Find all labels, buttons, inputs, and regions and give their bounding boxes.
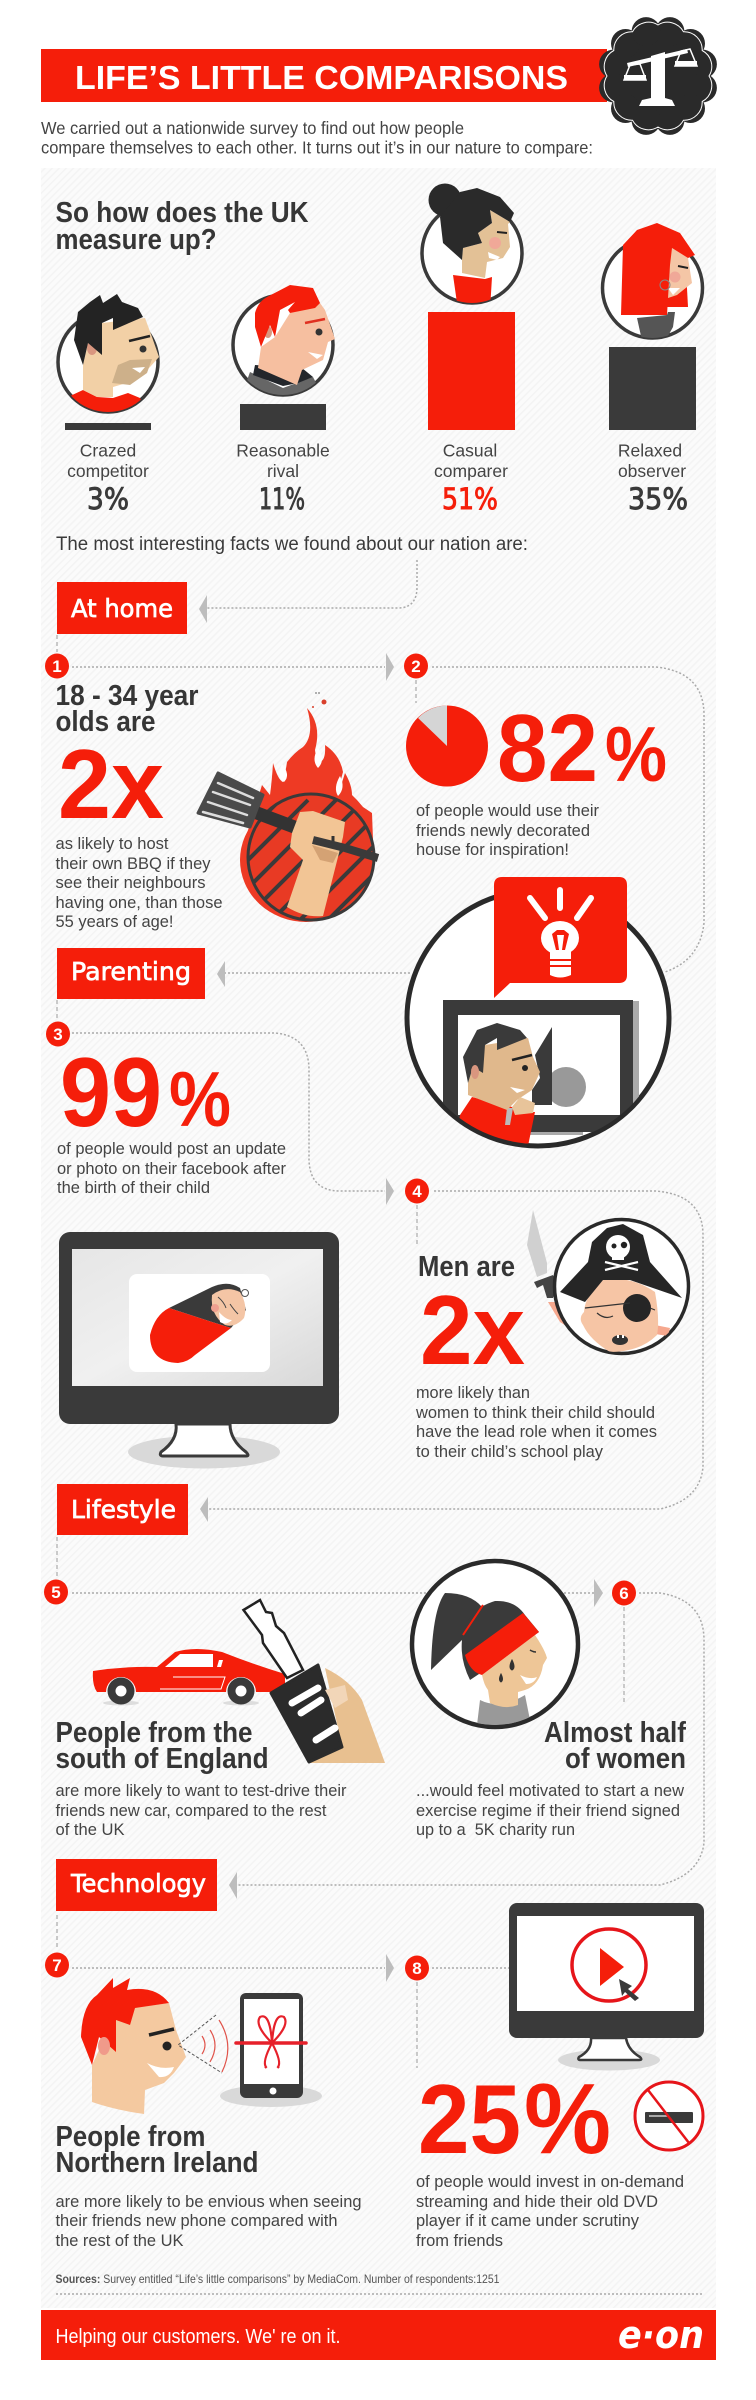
fact 2 text: 82 bbox=[497, 695, 598, 802]
intro text: compare themselves to each other. It turns out it’s in our nature to compare: bbox=[41, 138, 593, 158]
fact 7 text: Northern Ireland bbox=[56, 2147, 258, 2179]
fact 8 text: streaming and hide their old DVD bbox=[416, 2192, 658, 2211]
connector: 2 bbox=[415, 680, 417, 703]
fact 3 text: or photo on their facebook after bbox=[57, 1159, 286, 1178]
fact 5 text: friends new car, compared to the rest bbox=[56, 1801, 327, 1820]
fact 5 text: People from the bbox=[56, 1717, 252, 1749]
fact 7 text: the rest of the UK bbox=[56, 2231, 184, 2250]
stat: reasonable rival: 11% bbox=[259, 482, 305, 516]
connector: lifestyle to 5 bbox=[56, 1537, 58, 1578]
icon: BBQ grill with fist and spatula bbox=[196, 692, 380, 922]
number 2: 2 bbox=[411, 657, 421, 676]
fact 1 text: see their neighbours bbox=[56, 873, 206, 892]
intro text: We carried out a nationwide survey to find out how people bbox=[41, 118, 464, 138]
stat: relaxed observer: 35% bbox=[628, 482, 688, 516]
fact 7 text: People from bbox=[56, 2121, 206, 2153]
fact 8 text: player if it came under scrutiny bbox=[416, 2211, 639, 2230]
fact 3 text: the birth of their child bbox=[57, 1178, 210, 1197]
stat: relaxed observer: Relaxed bbox=[618, 440, 682, 460]
fact 7 text: their friends new phone compared with bbox=[56, 2211, 338, 2230]
number 6: 6 bbox=[619, 1584, 629, 1603]
icon: no DVD player bbox=[635, 2082, 703, 2150]
heading: measure up: So how does the UK bbox=[56, 197, 309, 229]
fact 5 text bbox=[56, 1717, 347, 1839]
fact 1 text: their own BBQ if they bbox=[56, 854, 211, 873]
section heading: technology: Technology bbox=[70, 1869, 206, 1898]
section heading: parenting bbox=[57, 948, 205, 999]
section heading: at home: At home bbox=[71, 594, 173, 623]
connector: 2 to parenting bbox=[217, 667, 704, 987]
illustration: pirate child bbox=[527, 1210, 688, 1354]
section heading: lifestyle bbox=[57, 1484, 188, 1535]
fact 5 text: are more likely to want to test-drive their bbox=[56, 1781, 347, 1800]
connector: facts to at home bbox=[199, 560, 417, 623]
stat: casual comparer: 51% bbox=[442, 482, 498, 516]
connector: 1 to 2 bbox=[72, 653, 394, 681]
fact 4 text: to their child’s school play bbox=[416, 1442, 603, 1461]
fact 6 text bbox=[416, 1717, 686, 1839]
fact 8 text: of people would invest in on-demand bbox=[416, 2172, 684, 2191]
illustration: sports car bbox=[93, 1649, 285, 1706]
illustration: woman runner bbox=[412, 1561, 578, 1727]
bar chart: comparison types bbox=[65, 312, 696, 430]
fact 6 text: of women bbox=[565, 1743, 686, 1775]
fact 2 text: house for inspiration! bbox=[416, 840, 569, 859]
fact 7 text bbox=[56, 2121, 362, 2250]
section heading: technology bbox=[56, 1859, 217, 1911]
fact 3 text: of people would post an update bbox=[57, 1139, 286, 1158]
stat: crazed competitor: competitor bbox=[67, 461, 149, 481]
stat: reasonable rival: rival bbox=[267, 461, 299, 481]
connector: 6 to technology bbox=[229, 1593, 704, 1899]
connector: 5 to 6 bbox=[72, 1579, 603, 1607]
icon: scales badge bbox=[599, 17, 717, 135]
connector: 6 bbox=[623, 1607, 625, 1703]
fact 8 text bbox=[416, 2063, 684, 2250]
illustration: monitor with baby bbox=[59, 1232, 339, 1468]
number 7: 7 bbox=[52, 1956, 62, 1975]
fact 8 text: % bbox=[524, 2063, 611, 2175]
connector: 8 bbox=[417, 1968, 509, 2068]
stat: reasonable rival: Reasonable bbox=[236, 440, 330, 460]
fact 5 text: south of England bbox=[56, 1743, 268, 1775]
illustration: man at window with lightbulb idea bbox=[407, 877, 669, 1146]
fact 8 text: from friends bbox=[416, 2231, 503, 2250]
fact 2 text bbox=[416, 695, 667, 859]
connector: parenting to 3 bbox=[56, 1000, 58, 1020]
portrait: relaxed observer bbox=[602, 223, 702, 345]
fact 4 text: 2x bbox=[420, 1275, 525, 1385]
portrait: casual comparer bbox=[422, 184, 522, 310]
fact 6 text: Almost half bbox=[544, 1717, 686, 1749]
fact 1 text: as likely to host bbox=[56, 834, 169, 853]
number 1: 1 bbox=[52, 657, 62, 676]
illustration: phone with ribbon bbox=[220, 1993, 322, 2107]
fact 4 text: women to think their child should bbox=[415, 1403, 655, 1422]
fact 4 text bbox=[415, 1251, 657, 1461]
intro text bbox=[41, 118, 593, 158]
stat: casual comparer: comparer bbox=[434, 461, 508, 481]
fact 6 text: ...would feel motivated to start a new bbox=[416, 1781, 685, 1800]
connector: 7 to 8 bbox=[72, 1954, 394, 1982]
fact 1 text: 55 years of age! bbox=[56, 912, 174, 931]
number 5: 5 bbox=[51, 1583, 61, 1602]
fact 1 text: olds are bbox=[56, 706, 156, 738]
footer banner bbox=[41, 2310, 716, 2360]
illustration: hand holding car key bbox=[244, 1600, 385, 1763]
fact 3 text: 99 bbox=[60, 1037, 162, 1147]
connector: 3 to 4 bbox=[72, 1033, 394, 1205]
fact 1 text: having one, than those bbox=[56, 893, 222, 912]
heading: measure up bbox=[56, 197, 309, 256]
stat: casual comparer: Casual bbox=[443, 440, 497, 460]
title banner: LIFE’S LITTLE COMPARISONS bbox=[75, 59, 568, 96]
connector: 4 to lifestyle bbox=[200, 1191, 703, 1522]
fact 1 text: 18 - 34 year bbox=[56, 680, 198, 712]
heading: measure up: measure up? bbox=[56, 224, 216, 256]
number 5 bbox=[44, 1580, 68, 1604]
number 1 bbox=[45, 654, 69, 678]
fact 1 text: 2x bbox=[58, 729, 164, 839]
footer banner: Helping our customers. We' re on it. bbox=[56, 2326, 340, 2348]
illustration: monitor with play button bbox=[509, 1903, 704, 2070]
number 8 bbox=[405, 1956, 429, 1980]
connector: at home to 1 bbox=[56, 635, 58, 652]
portrait: crazed competitor bbox=[58, 294, 159, 420]
number 7 bbox=[45, 1952, 69, 1978]
number 2 bbox=[404, 654, 428, 678]
footer banner: e·on bbox=[618, 2313, 704, 2357]
sight cone bbox=[178, 2015, 228, 2073]
fact 1 text bbox=[56, 680, 222, 931]
stat: reasonable rival bbox=[236, 440, 330, 516]
section heading: parenting: Parenting bbox=[71, 957, 191, 986]
stat: crazed competitor: 3% bbox=[87, 482, 129, 516]
icon: pie chart 82 percent bbox=[406, 706, 488, 786]
title banner bbox=[41, 49, 607, 102]
stat: relaxed observer: observer bbox=[618, 461, 686, 481]
fact 6 text: exercise regime if their friend signed bbox=[416, 1801, 680, 1820]
fact 4 text: Men are bbox=[418, 1251, 515, 1283]
intro to facts: The most interesting facts we found about our nation are: bbox=[56, 534, 528, 555]
fact 8 text: 25 bbox=[418, 2064, 521, 2174]
connector: 4 bbox=[416, 1205, 418, 1247]
fact 3 text: % bbox=[169, 1055, 231, 1143]
fact 3 text bbox=[57, 1037, 286, 1197]
number 3: 3 bbox=[53, 1025, 63, 1044]
stat: crazed competitor bbox=[67, 440, 149, 516]
stat: casual comparer bbox=[434, 440, 508, 516]
number 8: 8 bbox=[412, 1959, 422, 1978]
fact 6 text: up to a 5K charity run bbox=[416, 1820, 575, 1839]
fact 4 text: more likely than bbox=[416, 1383, 530, 1402]
background panel bbox=[41, 168, 716, 2308]
fact 2 text: friends newly decorated bbox=[416, 821, 590, 840]
fact 2 text: of people would use their bbox=[416, 801, 599, 820]
number 4 bbox=[405, 1178, 429, 1204]
portrait: reasonable rival bbox=[233, 285, 335, 400]
stat: crazed competitor: Crazed bbox=[80, 440, 136, 460]
number 4: 4 bbox=[412, 1182, 422, 1201]
fact 4 text: have the lead role when it comes bbox=[416, 1422, 657, 1441]
stat: relaxed observer bbox=[618, 440, 688, 516]
illustration: man profile looking bbox=[81, 1978, 186, 2114]
number 6 bbox=[612, 1580, 636, 1606]
number 3 bbox=[46, 1022, 70, 1046]
section heading: at home bbox=[57, 582, 187, 634]
section heading: lifestyle: Lifestyle bbox=[71, 1495, 176, 1524]
fact 7 text: are more likely to be envious when seeing bbox=[56, 2192, 362, 2211]
connector: technology to 7 bbox=[56, 1915, 58, 1950]
sources: Sources: Survey entitled “Life’s little comparisons” by MediaCom. Number of respondents:1251 bbox=[56, 2273, 500, 2286]
fact 2 text: % bbox=[605, 710, 667, 798]
fact 5 text: of the UK bbox=[56, 1820, 125, 1839]
